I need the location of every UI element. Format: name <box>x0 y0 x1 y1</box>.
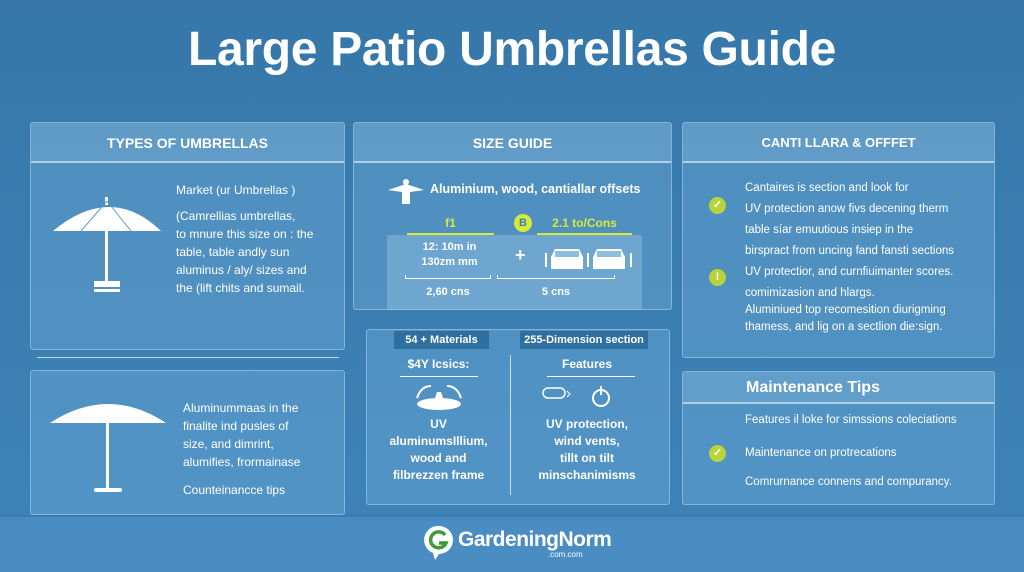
text: market umbrellas: table, table andly sun <box>176 245 289 259</box>
text: materials line: Aluminium, wood, cantiallar offsets <box>430 182 640 196</box>
icon: market umbrella <box>53 197 161 292</box>
label: 2.1 cons: B <box>519 217 527 229</box>
panel: types of umbrellas <box>30 122 345 350</box>
text: cantilever body: UV protection anow fivs decening therm <box>745 203 948 215</box>
icon: alert <box>709 269 726 286</box>
text: market umbrellas: to mnure this size on : the <box>176 227 313 241</box>
column: features: Features <box>562 357 612 371</box>
text: maintenance body <box>745 414 957 488</box>
icon: check <box>709 197 726 214</box>
column: materials: wood and <box>410 451 466 465</box>
label: f1 <box>407 215 494 235</box>
text: cantilever body: thamess, and lig on a sectlion die:sign. <box>745 321 943 333</box>
box: measurements: 12: 10m in <box>423 241 476 253</box>
column: features: minschanimisms <box>538 468 636 482</box>
panel: materials and features <box>366 329 670 505</box>
text: aluminum: Counteinancce tips <box>183 483 285 497</box>
panel: cantilever <box>682 122 995 358</box>
heading: maintenance: Maintenance Tips <box>746 379 880 396</box>
column: features: UV protection, <box>546 417 628 431</box>
column: materials: $4Y Icsics: <box>408 357 469 371</box>
column: features: tillt on tilt <box>560 451 614 465</box>
label: 2.1 cons <box>514 214 532 232</box>
icon: check: ✓ <box>713 199 722 211</box>
icon: offset umbrella <box>388 179 424 204</box>
column: features: wind vents, <box>554 434 620 448</box>
icon: check: ✓ <box>713 447 722 459</box>
logo: GardeningNorm <box>458 528 611 551</box>
text: cantilever body: comimizasion and hlargs. <box>745 287 875 299</box>
icon: patio umbrella <box>50 404 166 492</box>
icon: logo pin <box>424 526 453 560</box>
panel: size guide <box>353 122 672 310</box>
text: aluminum: finalite ind pusles of <box>183 419 288 433</box>
text: cantilever body: Aluminiued top recomesition diurigming <box>745 304 946 316</box>
box: measurements: 2,60 cns <box>426 286 470 298</box>
text: market umbrellas: aluminus / aly/ sizes and <box>176 263 307 277</box>
heading: size guide <box>354 123 671 163</box>
logo: .com.com <box>548 550 583 559</box>
text: cantilever body <box>745 182 954 333</box>
box: measurements: 5 cns <box>542 286 570 298</box>
icon: alert: ! <box>716 271 719 283</box>
text: maintenance body: Features il loke for simssions coleciations <box>745 414 957 426</box>
heading: size guide: SIZE GUIDE <box>473 135 552 151</box>
column: materials: UV <box>430 417 447 431</box>
tag: dimension: 255-Dimension section <box>524 334 644 346</box>
text: maintenance body: Maintenance on protrecations <box>745 447 897 459</box>
divider <box>37 357 339 358</box>
logo <box>424 526 611 560</box>
heading: types <box>31 123 344 163</box>
tag: materials: 54 + Materials <box>405 334 478 346</box>
panel: aluminum umbrellas <box>30 370 345 515</box>
footer band <box>0 515 1024 572</box>
icon: check <box>709 445 726 462</box>
text: maintenance body: Comrurnance connens and compurancy. <box>745 476 952 488</box>
text: cantilever body: table síar emuutious insiep in the <box>745 224 913 236</box>
icon: cars <box>545 249 632 269</box>
column: materials <box>389 357 488 482</box>
text: cantilever body: birspract from uncing fand fansti sections <box>745 245 954 257</box>
tag: materials <box>394 331 489 349</box>
text: aluminum: alumifies, frormainase <box>183 455 300 469</box>
heading: maintenance <box>683 372 994 404</box>
text: market umbrellas: Market (ur Umbrellas ) <box>176 183 295 197</box>
text: market umbrellas <box>176 183 313 295</box>
box: measurements: 130zm mm <box>421 256 478 268</box>
column: materials: aluminumsIllium, <box>389 434 488 448</box>
title: Large Patio Umbrellas Guide <box>188 23 836 76</box>
column: materials: filbrezzen frame <box>393 468 484 482</box>
heading: cantilever <box>683 123 994 163</box>
box: measurements: + <box>515 245 526 265</box>
icon: rotate base <box>416 385 462 410</box>
text: cantilever body: Cantaires is section and look for <box>745 182 909 194</box>
panel: size guide: 2.1 to/Cons <box>552 216 617 230</box>
icon: vent and power <box>542 386 610 407</box>
text: market umbrellas: (Camrellias umbrellas, <box>176 209 295 223</box>
tag: dimension <box>520 331 648 349</box>
text: market umbrellas: the (lift chits and sumail. <box>176 281 305 295</box>
text: cantilever body: UV protectior, and curnfiuimanter scores. <box>745 266 953 278</box>
text: aluminum: Aluminummaas in the <box>183 401 298 415</box>
text: aluminum: size, and dimrint, <box>183 437 274 451</box>
column: features <box>538 357 636 482</box>
box: measurements <box>387 235 642 310</box>
heading: types: TYPES OF UMBRELLAS <box>107 135 268 151</box>
heading: cantilever: CANTI LLARA & OFFFET <box>761 135 916 150</box>
label: f1: f1 <box>445 216 456 230</box>
text: aluminum <box>183 401 300 497</box>
panel: maintenance tips <box>682 371 995 505</box>
